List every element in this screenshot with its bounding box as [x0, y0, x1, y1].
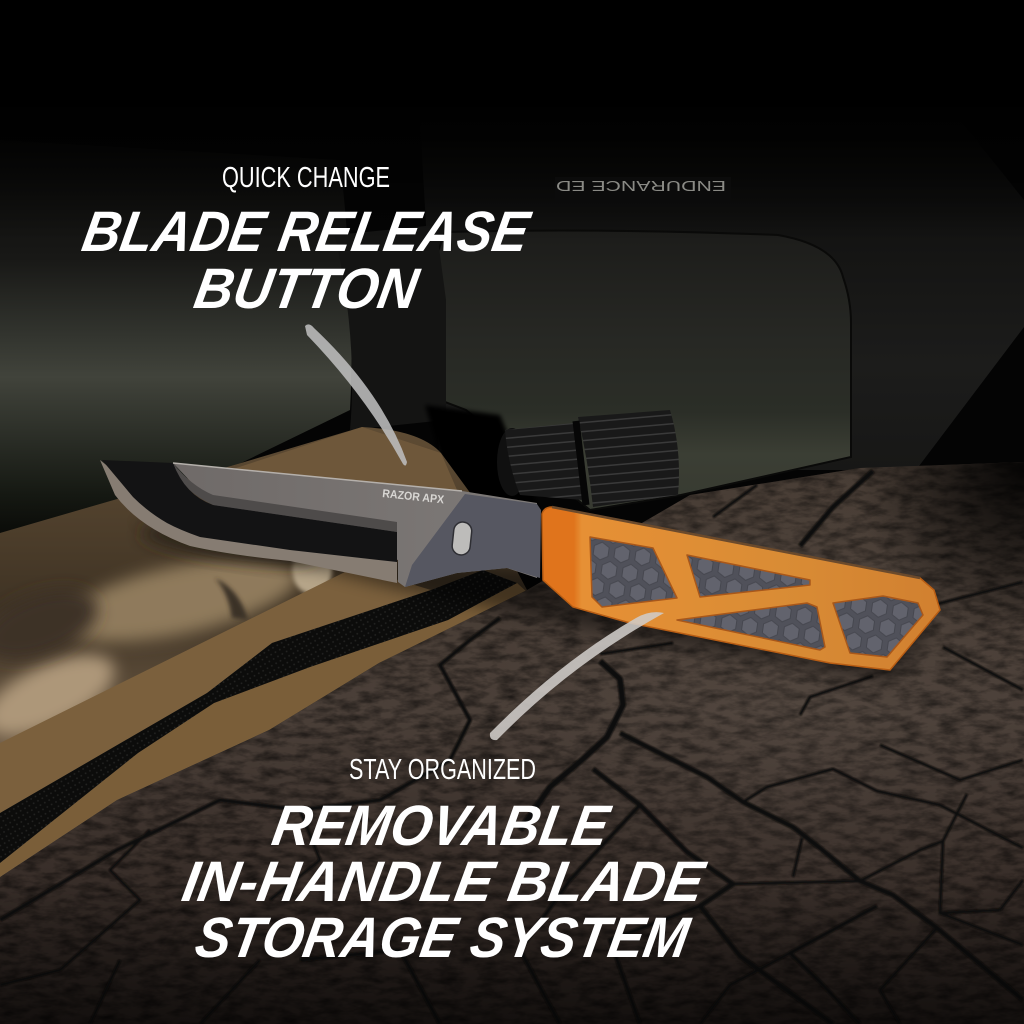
scope: shadow behind knob: [425, 405, 540, 510]
soft shadow under knife: [130, 520, 930, 680]
heading: BLADE RELEASE: [78, 200, 535, 264]
knife: tang: [405, 494, 541, 587]
scope: left tube: [0, 140, 352, 535]
heading: [178, 794, 711, 970]
heading: BUTTON: [190, 257, 424, 321]
wood cracks: [0, 471, 1023, 1024]
bag: lower flap: [0, 583, 527, 877]
callout: blade release: [78, 162, 535, 321]
top vignette: [0, 0, 1024, 240]
knife: dark bevel band: [173, 463, 397, 532]
subheading: QUICK CHANGE: [222, 162, 390, 194]
arrow: blade release: [305, 324, 407, 466]
callout: storage: [178, 754, 711, 970]
knife: black edge: [102, 460, 397, 562]
knife: handle: [542, 507, 940, 670]
scope: collar: [335, 225, 446, 430]
heading: REMOVABLE: [268, 794, 615, 858]
knife: blade: [100, 460, 537, 587]
subheading: STAY ORGANIZED: [349, 754, 536, 786]
spotting scope: [0, 120, 1024, 535]
scope: label: ENDURANCE ED: [556, 177, 726, 194]
bag: upper fabric highlight: [236, 427, 457, 490]
heading: STORAGE SYSTEM: [191, 906, 695, 970]
camo bag: [0, 427, 527, 877]
scope: focus knob: [497, 410, 679, 507]
scope: green housing: [435, 231, 851, 510]
knife: handle inserts: [590, 537, 923, 657]
heading: IN-HANDLE BLADE: [178, 850, 711, 914]
knife: serrated spine: [173, 463, 462, 491]
arrow: storage: [490, 612, 664, 740]
scope: rear body: [420, 120, 1024, 470]
scope: label: [555, 177, 731, 202]
wood stump: [0, 460, 1024, 1024]
bag: tan flap: [0, 567, 431, 813]
bag: camo patches: [0, 519, 332, 752]
bag: zipper: [0, 570, 517, 863]
knife: logo: RAZOR APX: [382, 488, 445, 506]
knife: [100, 460, 940, 670]
heading: [78, 200, 535, 321]
knife: cutting edge: [100, 460, 397, 583]
knife: release button: [451, 521, 473, 556]
